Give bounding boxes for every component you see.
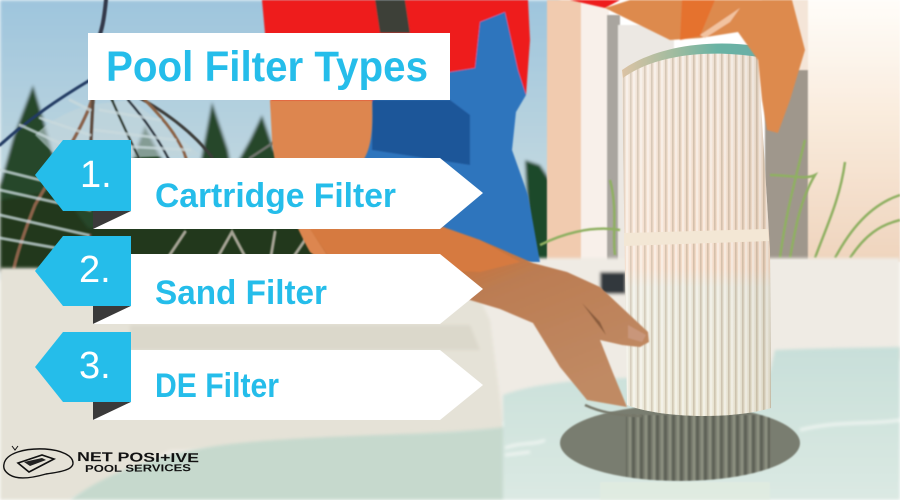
list item 1: Cartridge Filter bbox=[35, 140, 483, 229]
list item 3: DE Filter: 3. bbox=[79, 345, 111, 387]
icon: pool with lounger bbox=[4, 446, 73, 478]
list item 1: Cartridge Filter: 1. bbox=[80, 154, 112, 196]
background: water surface bbox=[70, 347, 900, 500]
filter centre band bbox=[624, 229, 769, 246]
worker: upper hand gripping filter bbox=[570, 0, 805, 133]
background: white column and window frame bbox=[547, 0, 900, 262]
title text: Pool Filter Types bbox=[106, 43, 428, 91]
list item 2: Sand Filter: 2. bbox=[79, 249, 111, 291]
background: grass blades bbox=[540, 140, 900, 258]
background: spa tub shell bbox=[0, 258, 900, 500]
list item 2: Sand Filter: Sand Filter bbox=[155, 274, 327, 312]
list item 1: Cartridge Filter: Cartridge Filter bbox=[155, 177, 396, 215]
worker: arm and lower hand bbox=[270, 100, 649, 416]
logo: Net Positive Pool Services: POOL SERVICES bbox=[85, 463, 191, 475]
title panel bbox=[88, 33, 450, 100]
list item 2: Sand Filter bbox=[35, 236, 483, 324]
background photo: sky, trees and garden bbox=[0, 0, 560, 280]
filter top cap bbox=[622, 43, 758, 78]
background: hanging egg chair frame bbox=[0, 0, 305, 268]
filter reflection in water bbox=[559, 407, 801, 482]
logo: Net Positive Pool Services bbox=[4, 446, 200, 478]
worker: red shirt and blue overalls bbox=[262, 0, 540, 262]
logo: Net Positive Pool Services: NET POSI+IVE bbox=[77, 449, 200, 465]
list item 3: DE Filter: DE Filter bbox=[155, 367, 279, 405]
list item 3: DE Filter bbox=[35, 332, 483, 420]
pleated cartridge filter bbox=[560, 43, 800, 500]
